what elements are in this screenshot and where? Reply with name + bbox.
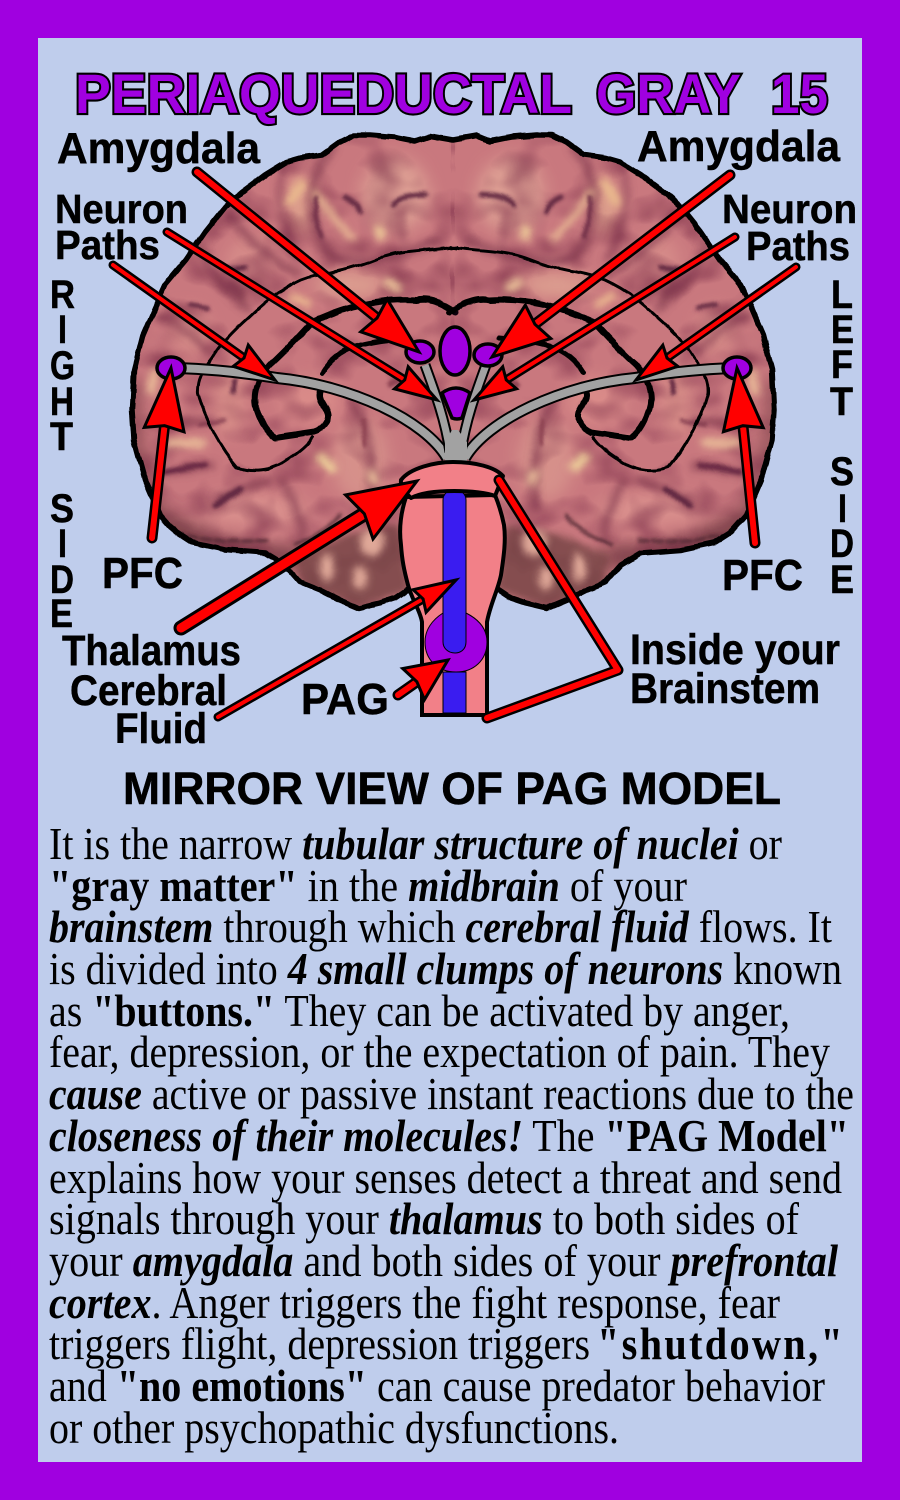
prefrontal cortex nodes <box>157 357 751 379</box>
title: 15 <box>771 62 828 125</box>
body text: closeness of their molecules! The "PAG Model" <box>49 1110 849 1161</box>
brain labels: Amygdala <box>57 124 261 173</box>
brain illustration <box>130 130 776 610</box>
vertical label: left side: F <box>831 343 853 387</box>
brain labels: Cerebral <box>70 667 227 715</box>
vertical label: left side: E <box>830 558 854 602</box>
body text: and "no emotions" can cause predator behavior <box>49 1360 825 1411</box>
body text <box>49 818 854 1453</box>
title: PERIAQUEDUCTAL <box>75 62 572 125</box>
fluid channel (upper) <box>443 490 466 653</box>
arrow: neuron path left inner <box>167 232 437 400</box>
body text: "gray matter" in the midbrain of your <box>49 860 687 911</box>
brain labels: Fluid <box>115 705 207 753</box>
fluid channel (lower) <box>443 672 466 713</box>
body text: cortex. Anger triggers the fight response, fear <box>49 1277 780 1328</box>
vertical label: right side: I <box>58 522 67 566</box>
bracket: inside your brainstem <box>487 480 618 718</box>
brain labels: Thalamus <box>62 627 241 675</box>
vertical label: left side: L <box>831 273 853 317</box>
brain labels: Paths <box>55 222 160 268</box>
title <box>75 62 828 125</box>
arrow: amygdala right <box>492 175 730 357</box>
vertical label: right side: S <box>50 487 74 531</box>
body text: is divided into 4 small clumps of neurons known <box>49 943 842 994</box>
vertical label: left side: T <box>830 380 853 424</box>
brain labels: Paths <box>746 223 850 269</box>
vertical label: left side: I <box>838 487 847 531</box>
vertical label: right side: H <box>50 380 74 424</box>
vertical label: left side <box>830 273 854 602</box>
brain labels: Neuron <box>55 186 188 232</box>
vertical label: left side: S <box>830 450 854 494</box>
vertical label: left side: D <box>830 522 854 566</box>
vertical label: right side <box>50 273 75 636</box>
brain labels: PFC <box>722 551 803 600</box>
vertical label: right side: R <box>50 273 75 317</box>
arrow: neuron path left outer <box>113 265 275 380</box>
body text: or other psychopathic dysfunctions. <box>49 1402 619 1453</box>
brain labels: Brainstem <box>630 665 820 713</box>
brainstem cross-section <box>400 462 505 715</box>
arrow: PAG <box>398 660 448 695</box>
periaqueductal gray ring <box>425 613 487 672</box>
body text: "shutdown," <box>597 1318 845 1369</box>
body text: triggers flight, depression triggers <box>49 1318 590 1369</box>
vertical label: right side: G <box>50 344 75 388</box>
arrow: neuron path right outer <box>636 267 796 380</box>
arrow: thalamus <box>181 481 417 628</box>
amygdala and center purple nodes <box>406 327 502 419</box>
arrow: cerebral fluid <box>218 580 456 717</box>
brain labels: Inside your <box>630 626 840 674</box>
body text: It is the narrow tubular structure of nuclei or <box>49 818 782 869</box>
arrow: amygdala left <box>197 172 419 352</box>
thalamus cap <box>401 462 503 498</box>
body text: as "buttons." They can be activated by anger, <box>49 985 790 1036</box>
neuron paths (gray nerve tracts) <box>178 365 734 464</box>
arrow: PFC right <box>737 368 755 543</box>
brain labels: Neuron <box>722 186 857 232</box>
vertical label: left side: E <box>831 308 854 352</box>
brain labels: PAG <box>301 675 389 724</box>
arrow: PFC left <box>152 368 171 538</box>
body text: your amygdala and both sides of your prefrontal <box>49 1235 838 1286</box>
brain labels: PFC <box>102 549 183 598</box>
body text: brainstem through which cerebral fluid flows. It <box>49 901 832 952</box>
brain labels: Amygdala <box>637 122 841 171</box>
vertical label: right side: E <box>50 592 73 636</box>
vertical label: right side: I <box>58 308 67 352</box>
arrow: neuron path right inner <box>474 237 735 400</box>
subheading: MIRROR VIEW OF PAG MODEL <box>123 763 781 814</box>
brain labels <box>55 122 857 753</box>
title: GRAY <box>596 62 741 125</box>
body text: signals through your thalamus to both sides of <box>49 1193 800 1244</box>
vertical label: right side: D <box>50 558 74 602</box>
vertical label: right side: T <box>50 415 73 459</box>
